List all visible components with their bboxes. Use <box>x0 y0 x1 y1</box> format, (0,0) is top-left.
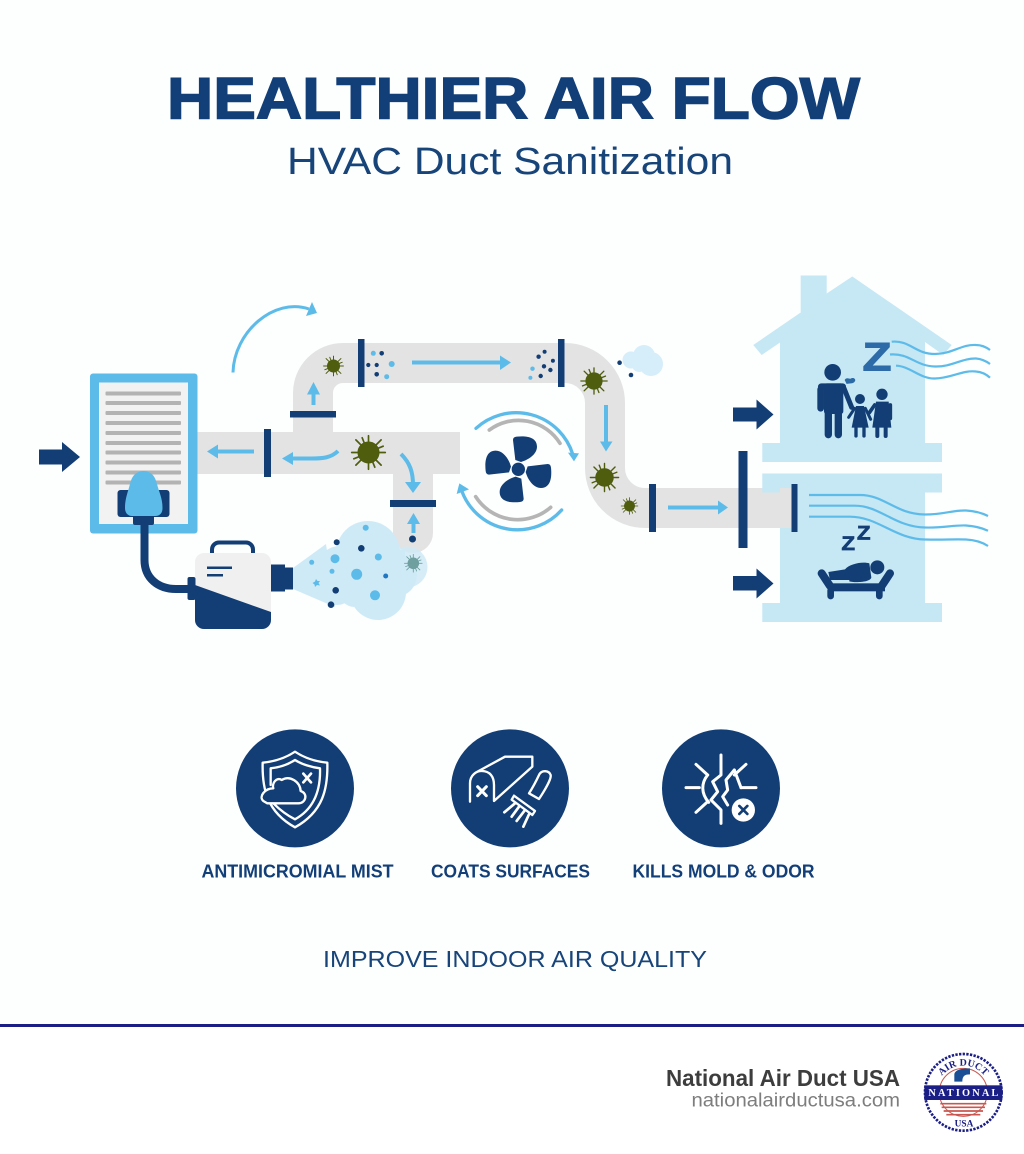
title: HEALTHIER AIR FLOW <box>167 66 860 132</box>
subtitle: HVAC Duct Sanitization <box>287 141 733 183</box>
person on bed <box>822 560 890 596</box>
logo: USA <box>955 1119 974 1129</box>
arrow: into upper floor <box>733 400 774 430</box>
sleep letters lower: Z <box>857 524 871 544</box>
clean air waves lower <box>809 495 988 546</box>
lower duct over house <box>780 484 798 532</box>
icon: kills mold and odor <box>662 729 780 847</box>
logo <box>924 1052 1003 1132</box>
sleep letter Z upper: Z <box>862 336 892 380</box>
sleep letters lower: Z <box>842 534 855 555</box>
arrow: outside air into filter <box>39 442 80 472</box>
footer <box>0 1024 1024 1132</box>
icon: antimicrobial mist <box>236 729 354 847</box>
mold and virus particles <box>324 350 638 514</box>
house upper floor <box>753 276 952 462</box>
tagline: IMPROVE INDOOR AIR QUALITY <box>323 946 707 972</box>
company name: National Air Duct USA <box>666 1065 900 1091</box>
hose and connector <box>118 471 192 589</box>
duct network <box>197 339 798 553</box>
clean air waves upper <box>890 342 990 379</box>
air filter <box>90 374 198 534</box>
label: coats surfaces: COATS SURFACES <box>431 860 590 882</box>
arrow: into lower floor <box>733 568 774 598</box>
family <box>821 364 891 436</box>
label: antimicrobial mist: ANTIMICROMIAL MIST <box>202 860 394 882</box>
fan <box>457 413 579 530</box>
sleep letters lower <box>842 524 871 555</box>
antimicrobial mist cloud <box>293 521 428 620</box>
logo: AIR DUCT <box>939 1059 990 1076</box>
small cloud <box>622 345 663 376</box>
airflow arrows in ducts <box>207 302 728 542</box>
fogging machine <box>188 542 293 629</box>
house lower floor <box>762 474 942 622</box>
website: nationalairductusa.com <box>692 1090 900 1112</box>
logo: NATIONAL <box>928 1088 998 1099</box>
label: kills mold and odor: KILLS MOLD & ODOR <box>632 860 814 882</box>
icon: coats surfaces <box>451 729 569 847</box>
